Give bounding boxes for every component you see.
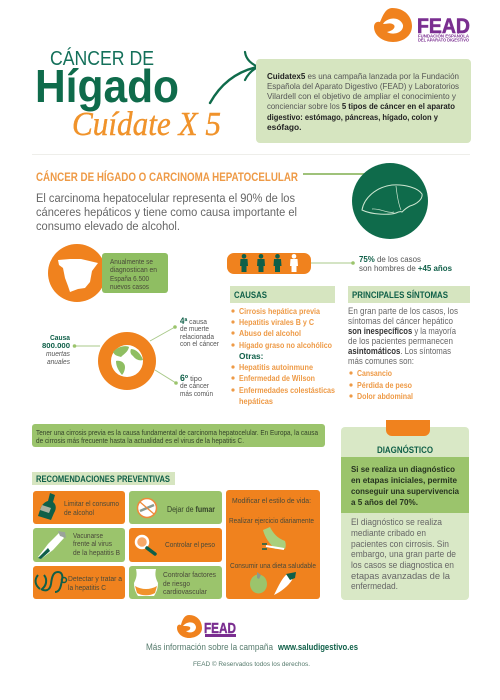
panel: campaign intro: digestivo: estómago, páncreas, hígado, colon y (267, 112, 438, 122)
callout: annual diagnoses (102, 253, 168, 293)
tile: lifestyle: Consumir una dieta saludable (230, 561, 316, 570)
tile: cardiovascular risk: de riesgo (163, 579, 190, 588)
logo: FEAD header: DEL APARATO DIGESTIVO (418, 38, 470, 42)
logo: FEAD header: FUNDACIÓN ESPAÑOLA (418, 34, 469, 38)
tile: hepatitis B vaccine: de la hepatitis B (73, 548, 120, 557)
tile: cardiovascular risk: Controlar factores (163, 570, 216, 579)
callout: annual diagnoses: diagnostican en (110, 265, 157, 274)
panel: causes (230, 286, 335, 406)
icon: apple and carrot (250, 572, 296, 595)
text block: intro: cánceres hepáticos y tiene como causa importante el (36, 205, 297, 219)
panel: diagnosis: a 5 años del 70%. (351, 497, 418, 507)
panel: main symptoms: PRINCIPALES SÍNTOMAS (352, 290, 448, 301)
panel: main symptoms: más comunes son: (348, 356, 414, 366)
text: deaths: anuales (47, 357, 70, 366)
tile: lifestyle: Realizar ejercicio diariamente (229, 516, 314, 525)
panel: diagnosis (341, 420, 469, 600)
panel: campaign intro: concienciar sobre los 5 tipos de cáncer en el aparato (267, 101, 455, 111)
logo: FEAD header (374, 8, 470, 42)
icon: sneaker (262, 527, 286, 549)
icon: globe (73, 325, 178, 390)
callout: cirrhosis: de cirrosis más frecuente hasta la actualidad es el virus de la hepatitis C. (36, 436, 244, 445)
panel: campaign intro: Vilardell con el objetivo de ampliar el conocimiento y (267, 91, 457, 101)
text: more information: Más información sobre la campaña (146, 642, 273, 652)
text block: intro (36, 191, 297, 233)
tile: quit smoking (129, 491, 222, 524)
panel: diagnosis: embargo, una gran parte de (351, 549, 456, 559)
panel: main symptoms: Dolor abdominal (357, 391, 413, 401)
logo: FEAD footer: FEAD (204, 620, 236, 637)
panel: diagnosis: etapas avanzadas de la (351, 571, 451, 581)
icon: liver (352, 163, 428, 239)
text: fourth cause: 4ª causa (180, 316, 208, 326)
tile: cardiovascular risk: cardiovascular (163, 587, 207, 596)
text: deaths: Causa (50, 333, 71, 342)
tile: hepatitis B vaccine: Vacunarse (73, 531, 103, 540)
tile: lifestyle (226, 490, 320, 599)
callout: annual diagnoses: España 6.500 (110, 274, 149, 283)
panel: diagnosis: Si se realiza un diagnóstico (351, 464, 455, 474)
logo: FEAD footer (177, 615, 236, 638)
panel: diagnosis: DIAGNÓSTICO (377, 444, 433, 455)
callout: cirrhosis: Tener una cirrosis previa es la causa fundamental de carcinoma hepatocelular. En Europa, la causa (36, 428, 319, 437)
panel: main symptoms: Cansancio (357, 368, 392, 378)
callout: 75% men: 75% de los casos (359, 254, 421, 264)
tile: limit alcohol: Limitar el consumo (64, 499, 119, 508)
arrow (210, 52, 258, 103)
callout: cirrhosis (32, 424, 325, 447)
tile: limit alcohol (33, 491, 125, 524)
panel: main symptoms (348, 286, 470, 401)
title (35, 47, 221, 143)
panel: main symptoms: asintomáticos. Los síntomas (348, 346, 451, 356)
panel: main symptoms: de los pacientes permanecen (348, 336, 453, 346)
text: more information: www.saludigestivo.es (277, 642, 358, 652)
callout: annual diagnoses: nuevos casos (110, 282, 149, 291)
text: sixth type (180, 373, 213, 398)
tile: lifestyle: Modificar el estilo de vida: (232, 496, 311, 505)
panel: diagnosis: los casos se diagnostica en (351, 560, 454, 570)
text: fourth cause: relacionada (180, 332, 215, 341)
title: CÁNCER DE (50, 47, 154, 70)
text block: intro: consumo elevado de alcohol. (36, 219, 180, 233)
panel: causes: Hígado graso no alcohólico (239, 340, 332, 350)
panel: causes: Enfermedad de Wilson (239, 373, 315, 383)
callout: 75% men (311, 254, 452, 273)
title: Cuídate X 5 (72, 106, 221, 143)
heading: preventive recommendations: RECOMENDACIONES PREVENTIVAS (36, 474, 170, 484)
panel: diagnosis: mediante cribado en (351, 528, 426, 538)
callout: annual diagnoses: Anualmente se (110, 257, 153, 266)
panel: causes: Otras: (239, 351, 263, 361)
tile: control weight: Controlar el peso (165, 540, 215, 549)
panel: causes: CAUSAS (234, 290, 267, 301)
panel: diagnosis: El diagnóstico se realiza (351, 517, 443, 527)
logo: FEAD header: FEAD (417, 15, 470, 38)
panel: main symptoms: son inespecíficos y la mayoría (348, 326, 457, 336)
text: fourth cause: de muerte (180, 324, 209, 333)
heading: section: CÁNCER DE HÍGADO O CARCINOMA HEPATOCELULAR (36, 171, 299, 184)
panel: diagnosis: pacientes con cirrosis. Sin (351, 539, 449, 549)
tile: hepatitis C: Detectar y tratar a (68, 574, 123, 583)
text: deaths: muertas (46, 349, 70, 358)
panel: causes: Hepatitis virales B y C (239, 317, 314, 327)
callout: 75% men: son hombres de +45 años (359, 263, 452, 273)
title: Hígado (35, 60, 179, 112)
text: sixth type: más común (180, 389, 213, 398)
panel: campaign intro: Española del Aparato Digestivo (FEAD) y Laboratorios (267, 81, 459, 91)
text: deaths: 800.000 (42, 341, 70, 350)
tile: quit smoking: Dejar de fumar (167, 504, 216, 514)
panel: campaign intro: esófago. (267, 122, 301, 132)
panel: main symptoms: Pérdida de peso (357, 380, 412, 390)
text block: intro: El carcinoma hepatocelular representa el 90% de los (36, 191, 295, 205)
panel: causes: Enfermedades colestásticas (239, 385, 335, 395)
text: deaths (42, 333, 71, 366)
panel: diagnosis: enfermedad. (351, 581, 398, 591)
panel: causes: Abuso del alcohol (239, 328, 301, 338)
panel: campaign intro: Cuidatex5 es una campaña lanzada por la Fundación (267, 71, 459, 81)
text: sixth type: de cáncer (180, 381, 209, 390)
panel: causes: hepáticas (239, 396, 273, 406)
panel: causes: Hepatitis autoinmune (239, 362, 313, 372)
panel: main symptoms: En gran parte de los casos, los (348, 306, 458, 316)
tile: hepatitis B vaccine (33, 528, 125, 562)
icon: people pictogram (227, 253, 311, 274)
text: fourth cause: con el cáncer (180, 339, 219, 348)
panel: causes: Cirrosis hepática previa (239, 306, 320, 316)
tile: hepatitis C (33, 566, 125, 599)
text: more information (146, 642, 358, 652)
text: copyright: FEAD © Reservados todos los derechos. (193, 660, 310, 668)
panel: main symptoms: síntomas del cáncer hepático (348, 316, 453, 326)
tile: limit alcohol: de alcohol (64, 508, 94, 517)
tile: cardiovascular risk (129, 566, 222, 599)
tile: hepatitis B vaccine: frente al virus (73, 539, 112, 548)
tile: hepatitis C: la hepatitis C (68, 583, 106, 592)
icon: Spain map (48, 244, 106, 302)
panel: diagnosis: conseguir una supervivencia (351, 486, 459, 496)
text: sixth type: 6º tipo (180, 373, 202, 383)
tile: control weight (129, 528, 222, 562)
panel: diagnosis: en etapas iniciales, permite (351, 475, 457, 485)
heading: preventive recommendations (32, 472, 175, 485)
panel: campaign intro (256, 59, 471, 143)
text: fourth cause (180, 316, 219, 348)
